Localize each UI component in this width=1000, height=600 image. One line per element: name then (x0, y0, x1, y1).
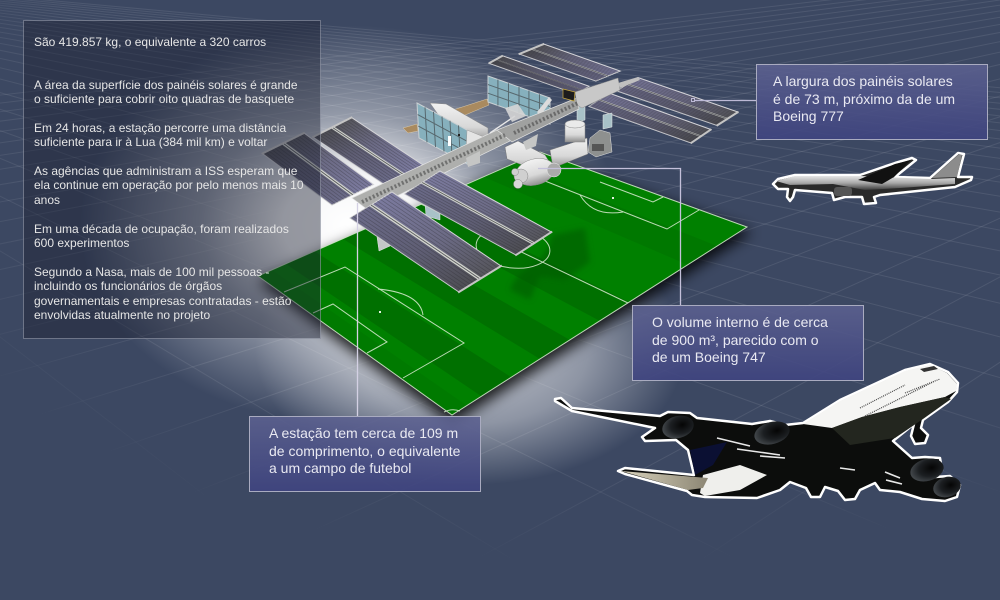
field markings (258, 152, 747, 415)
callout: solar panel width (756, 64, 988, 140)
solar arrays: left pair (262, 117, 424, 205)
747 belly (832, 397, 951, 445)
brown radiator strips (403, 99, 489, 133)
Boeing 777 (773, 153, 972, 204)
fact: solar panel area (34, 78, 298, 106)
747 tailplane (621, 471, 708, 490)
fact: people involved: Segundo a Nasa, mais de 100 mil pessoas - (34, 265, 269, 279)
747 cockpit (920, 366, 938, 372)
solar arrays: front pair (349, 171, 552, 293)
callout: station length (249, 416, 481, 492)
fact: distance: suficiente para ir à Lua (384 mil km) e voltar (34, 135, 267, 149)
callout: solar panel width: Boeing 777 (773, 108, 844, 124)
fact: experiments: 600 experimentos (34, 236, 129, 250)
space station (262, 44, 738, 293)
callout: internal volume: O volume interno é de cerca (652, 314, 828, 330)
field stripes (258, 164, 717, 415)
fact: people involved: incluindo os funcionários de órgãos (34, 279, 222, 293)
solar arrays: far pair (489, 44, 621, 94)
field shadow (258, 158, 752, 424)
Boeing 747 (555, 364, 963, 501)
callout: internal volume (632, 305, 864, 381)
callout: station length: de comprimento, o equivalente (269, 442, 460, 458)
football field (258, 152, 747, 415)
fact: solar panel area: o suficiente para cobrir oito quadras de basquete (34, 92, 294, 106)
747 silhouette (555, 364, 960, 501)
777 silhouette (773, 153, 972, 204)
747 tail fin (690, 442, 727, 475)
leader line: internal volume (538, 168, 680, 305)
leader line: solar panel width (692, 98, 757, 102)
struts (377, 105, 612, 251)
fact: people involved (34, 265, 291, 322)
777 engine (834, 187, 852, 196)
777 tail (932, 155, 962, 178)
teal radiator panels (417, 76, 552, 165)
fact: remaining service life (34, 164, 304, 207)
callout: internal volume: de um Boeing 747 (652, 349, 766, 365)
777 upper fuselage (776, 176, 955, 190)
fact: remaining service life: anos (34, 193, 60, 207)
747 engines (660, 412, 963, 500)
fact: experiments (34, 222, 289, 250)
panel: facts list (23, 20, 321, 339)
callout: solar panel width: A largura dos painéis solares (773, 73, 953, 89)
main truss (352, 77, 640, 210)
fact: mass: São 419.857 kg, o equivalente a 320 carros (34, 35, 266, 49)
fact: distance (34, 121, 286, 149)
fact: distance: Em 24 horas, a estação percorre uma distância (34, 121, 286, 135)
fact: remaining service life: As agências que administram a ISS esperam que (34, 164, 297, 178)
penalty spots (379, 197, 614, 313)
747 windows (860, 379, 940, 416)
fact: experiments: Em uma década de ocupação, foram realizados (34, 222, 289, 236)
callout: solar panel width: é de 73 m, próximo da de um (773, 90, 955, 106)
777 wing (858, 160, 911, 184)
callout: internal volume: de 900 m³, parecido com o (652, 332, 819, 348)
leader line: station length (356, 203, 358, 417)
modules (505, 120, 612, 190)
fact: people involved: governamentais e empresas contratadas - estão (34, 294, 291, 308)
747 flap highlights (717, 438, 902, 484)
callout: station length: a um campo de futebol (269, 460, 411, 476)
fact: people involved: envolvidas atualmente no projeto (34, 308, 210, 322)
fact: remaining service life: ela continue em operação por pelo menos mais 10 (34, 178, 304, 192)
fact: solar panel area: A área da superfície dos painéis solares é grande (34, 78, 298, 92)
solar arrays: right pair (589, 77, 738, 143)
747 rear fuselage (700, 465, 767, 496)
callout: station length: A estação tem cerca de 109 m (269, 425, 458, 441)
station shadow on field (510, 228, 590, 300)
747 upper fuselage (803, 365, 957, 428)
